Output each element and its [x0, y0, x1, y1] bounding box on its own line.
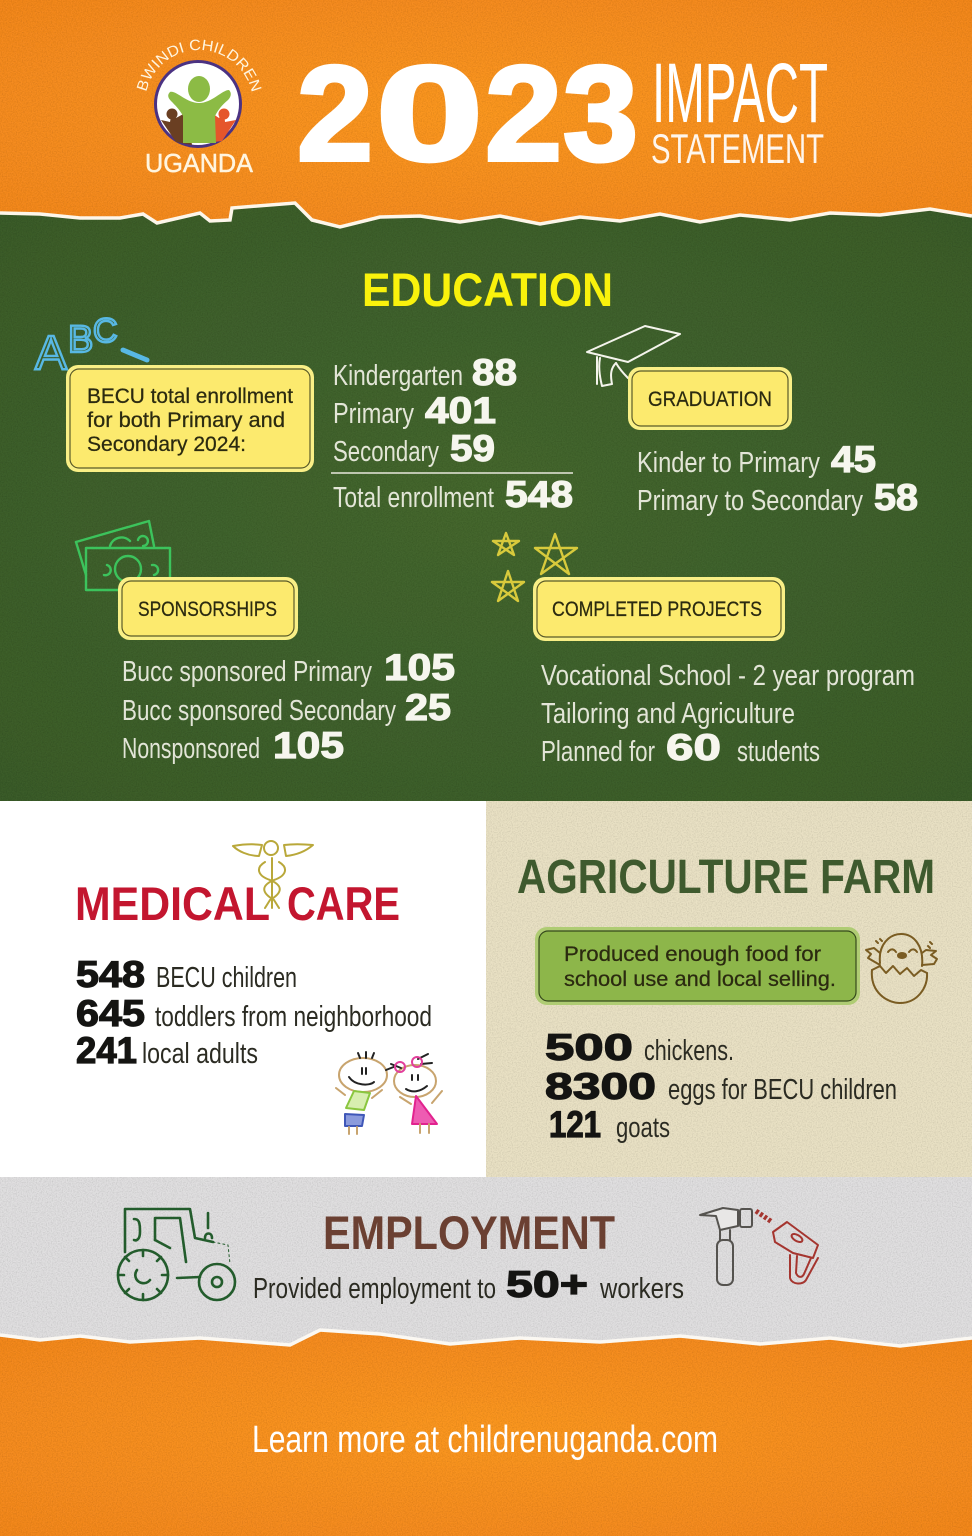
text block: medical figures: toddlers from neighborhood [155, 1001, 432, 1033]
callout: total enrollment: BECU total enrollment [87, 385, 293, 408]
text block: medical figures: 241 [76, 1030, 137, 1071]
label box: sponsorships: SPONSORSHIPS [138, 598, 277, 621]
icon: banknotes [76, 521, 170, 590]
title: 2023 [297, 38, 638, 189]
text block: graduation figures: 45 [831, 439, 876, 480]
text block: sponsorship figures: 25 [405, 687, 451, 728]
text block: completed projects details: Tailoring and Agriculture [541, 698, 795, 730]
text block: sponsorship figures: Nonsponsored [122, 733, 260, 765]
text block: sponsorship figures [122, 647, 455, 766]
callout: food production: Produced enough food for [564, 943, 821, 966]
panel: employment background [0, 1177, 972, 1357]
text block: enrollment figures: Secondary [333, 436, 439, 468]
label box: graduation: GRADUATION [648, 388, 772, 411]
logo curved name: BWINDI CHILDREN [136, 40, 262, 92]
text block: enrollment figures: Primary [333, 398, 414, 430]
panel: orange footer with torn edge [0, 1330, 972, 1536]
text block: enrollment figures: Total enrollment [333, 482, 494, 514]
icon: tractor [118, 1209, 235, 1300]
icon: caduceus [233, 841, 313, 908]
panel: education chalkboard background [0, 200, 972, 801]
callout: total enrollment: for both Primary and [87, 409, 285, 432]
text block: completed projects details: students [737, 736, 820, 768]
icon: graduation cap [587, 326, 680, 386]
callout: total enrollment: Secondary 2024: [87, 433, 246, 456]
text block: graduation figures: Kinder to Primary [637, 447, 820, 479]
text block: medical figures: local adults [142, 1038, 258, 1070]
logo circle with figures [156, 62, 240, 146]
label box: completed projects: COMPLETED PROJECTS [552, 598, 762, 621]
heading: employment: EMPLOYMENT [323, 1206, 615, 1259]
text block: employment line: workers [599, 1273, 684, 1305]
icon: drill [756, 1211, 818, 1284]
heading: medical care [75, 877, 400, 930]
panel: orange header with torn edge [0, 0, 972, 227]
panel: agriculture farm background [486, 801, 972, 1177]
title: 2023: 3 [563, 38, 638, 189]
icon: ABC chalk: C [93, 312, 118, 350]
text block: medical figures: 645 [76, 993, 145, 1034]
text block: enrollment figures: 401 [425, 390, 496, 431]
text block: employment line: Provided employment to [253, 1273, 496, 1305]
text block: farm figures: 121 [549, 1104, 601, 1145]
logo UGANDA wordmark: UGANDA [145, 148, 254, 178]
icon: ABC chalk: B [68, 319, 93, 361]
text block: enrollment figures: 88 [472, 352, 517, 393]
icon: chick hatching [866, 934, 937, 1003]
text block: medical figures: 548 [76, 954, 145, 995]
callout: total enrollment [66, 365, 314, 472]
text block: enrollment figures: 548 [505, 474, 573, 515]
text block: medical figures: BECU children [156, 962, 297, 994]
icon: ABC chalk: A [35, 327, 67, 380]
icon: two children drawing [336, 1052, 442, 1134]
text block: sponsorship figures: Bucc sponsored Primary [122, 656, 372, 688]
title: 2023: 2 [485, 38, 562, 189]
icon: ABC chalk [35, 312, 147, 380]
text block: completed projects details: 60 [666, 727, 721, 768]
title: 2023: 0 [376, 38, 483, 189]
text block: farm figures: chickens. [644, 1035, 734, 1067]
text block: graduation figures [637, 439, 918, 518]
text block: sponsorship figures: 105 [384, 647, 455, 688]
text block: medical figures [76, 954, 432, 1071]
heading: education: EDUCATION [362, 263, 613, 316]
callout: food production: school use and local selling. [564, 968, 836, 991]
title: impact statement: IMPACT [652, 46, 828, 140]
text block: farm figures [545, 1027, 897, 1145]
label box: completed projects [533, 577, 785, 641]
text block: sponsorship figures: 105 [273, 725, 344, 766]
heading: medical care: MEDICAL [75, 877, 270, 930]
text block: employment line [253, 1264, 684, 1305]
text block: sponsorship figures: Bucc sponsored Secondary [122, 695, 396, 727]
text block: employment line: 50+ [506, 1264, 588, 1305]
icon: hammer [700, 1208, 752, 1285]
icon: chalk stars [492, 533, 577, 601]
label box: sponsorships [118, 577, 298, 640]
text block: enrollment figures: 59 [450, 428, 495, 469]
text block: graduation figures: 58 [874, 477, 918, 518]
text block: farm figures: 500 [545, 1027, 633, 1068]
text block: farm figures: goats [616, 1112, 670, 1144]
text block: enrollment figures: Kindergarten [333, 360, 463, 392]
text block: farm figures: 8300 [545, 1066, 656, 1107]
text block: completed projects details: Planned for [541, 736, 655, 768]
title: 2023: 2 [297, 38, 373, 189]
text block: enrollment figures [331, 352, 573, 515]
title: impact statement: STATEMENT [651, 125, 824, 172]
footer: learn more link text: Learn more at childrenuganda.com [252, 1419, 718, 1461]
title: impact statement [651, 46, 828, 172]
text block: farm figures: eggs for BECU children [668, 1074, 897, 1106]
label box: graduation [628, 367, 792, 430]
text block: graduation figures: Primary to Secondary [637, 485, 863, 517]
text block: completed projects details [541, 660, 915, 768]
panel: medical care background [0, 801, 486, 1177]
callout: food production [535, 927, 860, 1005]
logo: Bwindi Children Uganda [136, 40, 262, 178]
heading: medical care: CARE [287, 877, 400, 930]
